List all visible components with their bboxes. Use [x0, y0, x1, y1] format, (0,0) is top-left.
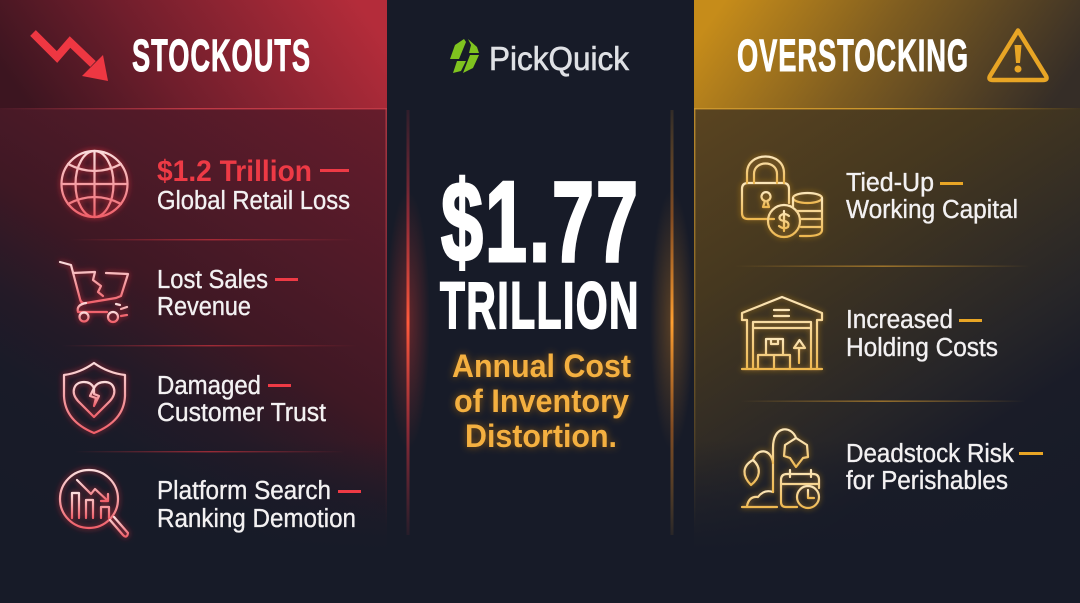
item: tied-up working capital	[742, 156, 1018, 237]
label: global retail loss: Global Retail Loss	[157, 187, 350, 215]
icon: broken cart	[60, 262, 128, 322]
label: ranking demotion: Ranking Demotion	[157, 505, 356, 533]
center column	[386, 39, 694, 535]
icon: green bolt mark	[450, 39, 479, 73]
caption: annual cost of inventory distortion: Annual Cost	[452, 348, 631, 384]
label: customer trust: Customer Trust	[157, 399, 326, 427]
wordmark: PickQuick	[489, 40, 629, 77]
panel: stockouts	[0, 0, 387, 603]
headline unit: TRILLION	[440, 268, 640, 342]
item: global retail loss	[62, 151, 350, 217]
icon: warning triangle	[989, 30, 1047, 80]
label: working capital: Working Capital	[846, 196, 1018, 224]
item: lost sales revenue	[60, 262, 298, 322]
label: for perishables: for Perishables	[846, 467, 1008, 495]
item: deadstock risk for perishables	[742, 429, 1043, 508]
label: lost sales: Lost Sales	[157, 266, 268, 294]
icon: lock and coins	[742, 156, 822, 237]
headline figure: $1.77	[441, 159, 640, 286]
label: platform search: Platform Search	[157, 477, 331, 505]
stat: 1.2 trillion: $1.2 Trillion	[157, 155, 312, 188]
icon: falling arrow	[33, 33, 108, 81]
icon: globe	[62, 151, 128, 217]
item: platform search ranking demotion	[60, 470, 361, 537]
caption: annual cost of inventory distortion: Distortion.	[465, 418, 617, 454]
item: damaged customer trust	[64, 363, 326, 433]
label: holding costs: Holding Costs	[846, 334, 998, 362]
caption: annual cost of inventory distortion: of Inventory	[454, 383, 629, 419]
icon: shield with broken heart	[64, 363, 125, 433]
icon: warehouse	[742, 297, 822, 369]
label: deadstock risk: Deadstock Risk	[846, 440, 1014, 468]
label: revenue: Revenue	[157, 293, 251, 321]
caption: annual cost of inventory distortion	[452, 348, 631, 454]
icon: wilted plant and calendar	[742, 429, 819, 508]
label: increased: Increased	[846, 306, 953, 334]
label: damaged: Damaged	[157, 372, 261, 400]
label: tied-up: Tied-Up	[846, 169, 934, 197]
icon: magnifier with falling chart	[60, 470, 128, 537]
panel: overstocking	[694, 0, 1080, 603]
logo: pickquick	[450, 39, 629, 77]
heading: stockouts: STOCKOUTS	[132, 30, 311, 81]
item: increased holding costs	[742, 297, 998, 369]
